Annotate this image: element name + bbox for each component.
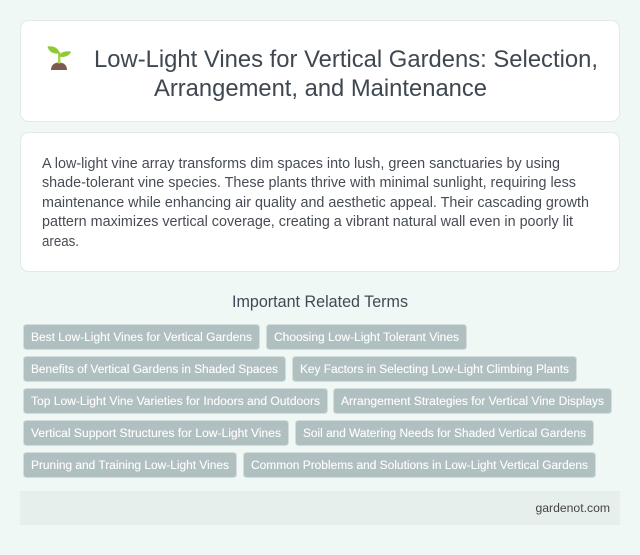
tag: Key Factors in Selecting Low-Light Climbing Plants xyxy=(300,362,569,376)
footer source text: gardenot.com xyxy=(536,501,610,515)
text block: description: maintenance while enhancing air quality and aesthetic appeal. Their cascading growth xyxy=(42,195,589,211)
tag xyxy=(296,420,594,446)
text block: description: shade-tolerant vine species. These plants thrive with minimal sunlight, requiring less xyxy=(42,175,576,191)
tag xyxy=(244,452,596,478)
tag: Vertical Support Structures for Low-Light Vines xyxy=(31,426,281,440)
tag xyxy=(292,356,576,382)
tag: Top Low-Light Vine Varieties for Indoors and Outdoors xyxy=(31,394,320,408)
tag: Benefits of Vertical Gardens in Shaded Spaces xyxy=(31,362,278,376)
icon: seedling xyxy=(48,46,71,70)
panel: title card xyxy=(20,20,620,122)
tag xyxy=(24,324,260,350)
title xyxy=(94,46,598,102)
tag: Common Problems and Solutions in Low-Light Vertical Gardens xyxy=(251,458,588,472)
text block: description xyxy=(42,156,589,250)
tag xyxy=(24,356,286,382)
tag: Arrangement Strategies for Vertical Vine Displays xyxy=(341,394,604,408)
title: Low-Light Vines for Vertical Gardens: Selection, xyxy=(94,46,598,73)
tag xyxy=(24,420,288,446)
text block: description: A low-light vine array transforms dim spaces into lush, green sanctuaries by using xyxy=(42,156,560,172)
footer xyxy=(20,491,620,525)
panel: description card xyxy=(20,132,620,272)
text block: description: areas. xyxy=(42,234,79,250)
tag xyxy=(266,324,466,350)
tag: Choosing Low-Light Tolerant Vines xyxy=(274,330,459,344)
tag xyxy=(24,452,236,478)
title: Arrangement, and Maintenance xyxy=(154,75,487,102)
tag: Best Low-Light Vines for Vertical Gardens xyxy=(31,330,252,344)
tag: Soil and Watering Needs for Shaded Vertical Gardens xyxy=(303,426,586,440)
text block: description: pattern maximizes vertical coverage, creating a vibrant natural wall even in poorly lit xyxy=(42,214,573,230)
panel: related term tags xyxy=(24,324,612,478)
heading: important related terms: Important Related Terms xyxy=(232,293,408,311)
tag: Pruning and Training Low-Light Vines xyxy=(31,458,229,472)
tag xyxy=(334,388,612,414)
tag xyxy=(24,388,328,414)
